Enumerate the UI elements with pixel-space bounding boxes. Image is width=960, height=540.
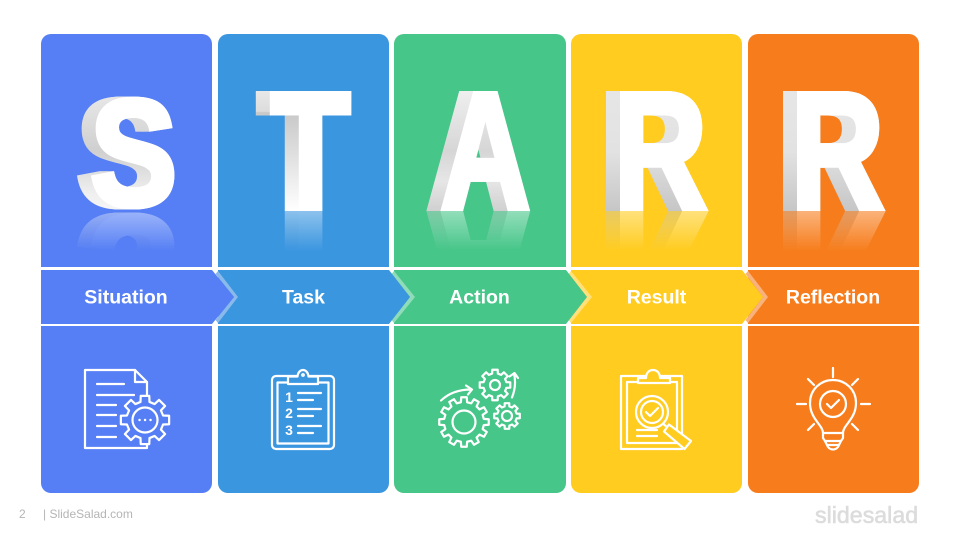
letter S with extrusion: S	[90, 69, 177, 237]
icon: light bulb with check	[797, 368, 870, 450]
reflection of T	[284, 211, 322, 246]
second letter R with extrusion: R	[791, 59, 884, 244]
panel: Task column	[218, 34, 389, 493]
chevron band	[41, 267, 919, 326]
label: Action: Action	[449, 286, 510, 308]
label: Reflection: Reflection	[786, 286, 880, 308]
reflection of R	[606, 211, 709, 247]
logo: slidesalad: slidesalad	[815, 502, 918, 528]
letter T with extrusion: T	[271, 58, 350, 244]
icon: document with gear	[85, 370, 169, 448]
letter A with extrusion: A	[440, 59, 530, 244]
reflection of second R	[783, 211, 886, 247]
reflection of T: T	[271, 178, 350, 364]
panel: Reflection column	[748, 34, 919, 493]
reflection of S: S	[90, 185, 177, 353]
label: Situation: Situation	[84, 286, 168, 308]
footer page number: 2	[19, 507, 26, 521]
reflection of S	[78, 212, 174, 246]
numbers 1 2 3	[285, 389, 293, 438]
reflection of second R: R	[791, 178, 884, 363]
icon: clipboard with magnifier	[621, 370, 691, 449]
panel: Action column	[394, 34, 566, 493]
letter T with extrusion: T	[271, 58, 350, 244]
label: Result: Result	[627, 286, 687, 308]
numbers 1 2 3: 3	[285, 422, 293, 438]
icon: gears with arrows	[439, 370, 520, 447]
label: Task: Task	[282, 286, 325, 308]
footer site name: | SlideSalad.com	[43, 507, 133, 521]
second letter R with extrusion: R	[791, 59, 884, 244]
reflection of R: R	[614, 178, 707, 363]
numbers 1 2 3: 1	[285, 389, 293, 405]
reflection of A: A	[440, 178, 530, 363]
numbers 1 2 3: 2	[285, 405, 293, 421]
panel: Situation column	[41, 34, 212, 493]
reflection of A: A	[440, 178, 530, 363]
reflection of A	[426, 211, 530, 246]
reflection of S: S	[90, 185, 177, 353]
reflection of T: T	[271, 178, 350, 364]
panel: Result column	[571, 34, 742, 493]
letter A with extrusion: A	[440, 59, 530, 244]
icon: numbered clipboard	[272, 370, 334, 449]
letter S with extrusion: S	[90, 69, 177, 237]
reflection of R: R	[614, 178, 707, 363]
letter R with extrusion: R	[614, 59, 707, 244]
reflection of second R: R	[791, 178, 884, 363]
letter R with extrusion: R	[614, 59, 707, 244]
